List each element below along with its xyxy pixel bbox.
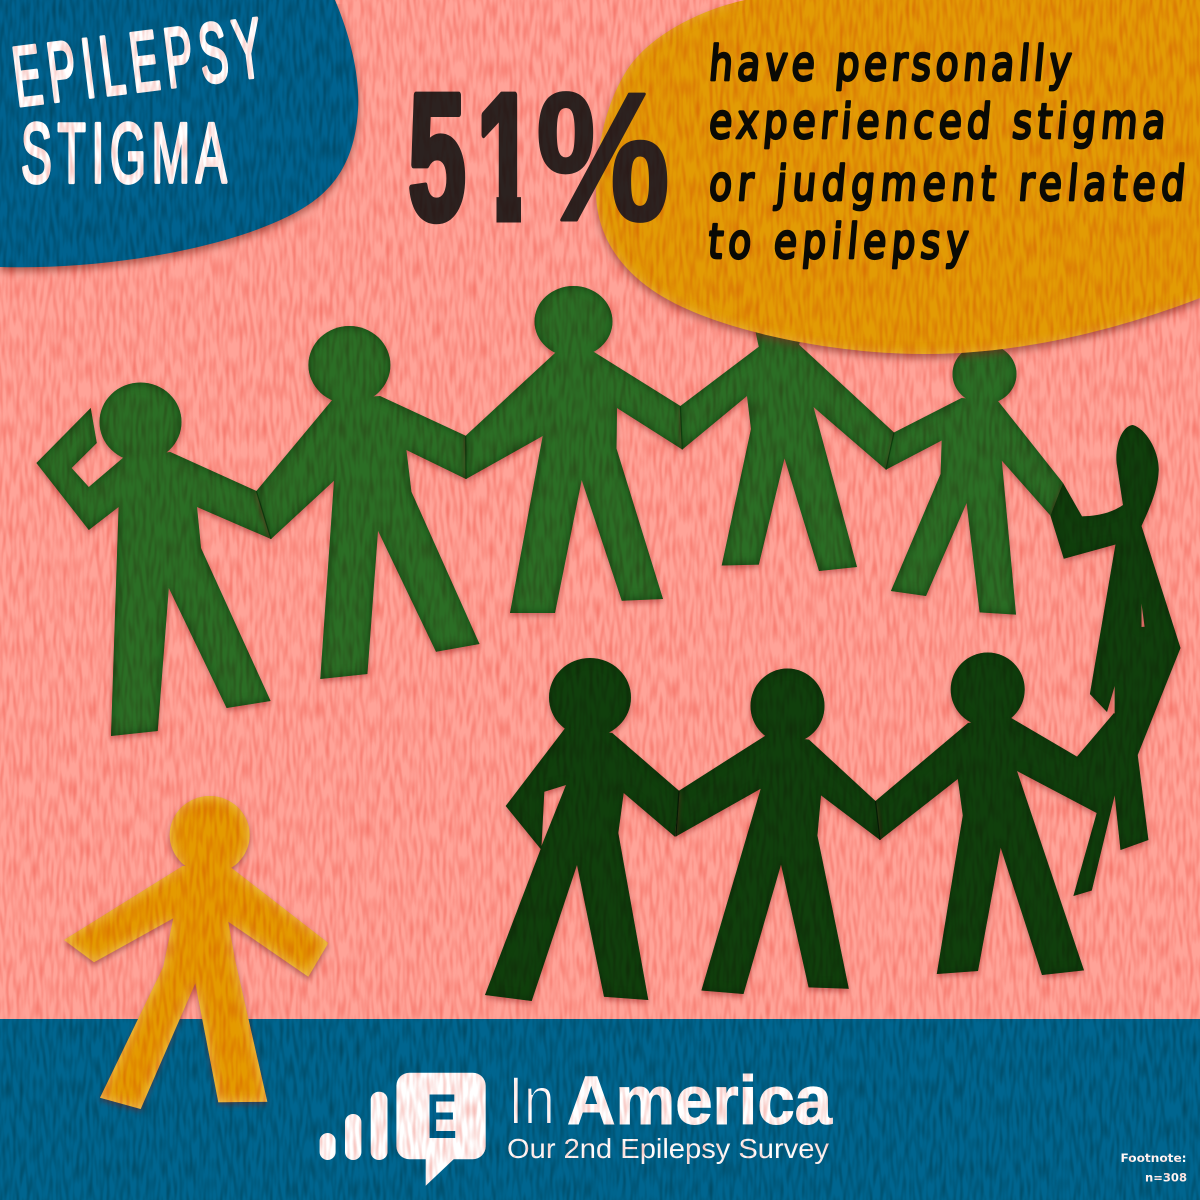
fold lines at the joined hands <box>256 406 894 840</box>
paper chain: figure 1, green person holding phone <box>36 382 271 736</box>
paper chain: figure 5, smaller green person <box>886 344 1063 615</box>
panel: statistic blob <box>596 0 1200 354</box>
paper chain: figure 9, dark green person hand on hip <box>485 658 679 1001</box>
logo subtitle: Our 2nd Epilepsy Survey <box>507 1133 829 1164</box>
title line: stigma: STIGMA <box>21 108 227 201</box>
logo: InAmerica, Our 2nd Epilepsy Survey <box>320 1062 833 1186</box>
figure: yellow outcast person <box>64 796 328 1109</box>
paper chain: figure 2, green person <box>256 326 480 679</box>
line 1: have personally <box>707 37 1074 92</box>
footer band <box>0 1019 1200 1200</box>
footnote <box>1120 1151 1187 1184</box>
icon: speech bubble <box>396 1073 486 1186</box>
title <box>8 1 267 201</box>
wordmark America: America <box>567 1062 833 1139</box>
line 4: to epilepsy <box>706 215 971 270</box>
footnote label: Footnote: <box>1120 1151 1186 1165</box>
line 3: or judgment related <box>707 157 1188 212</box>
title line: epilepsy: EPILEPSY <box>8 1 267 125</box>
number 51: 51 <box>408 58 535 258</box>
statistic: 51 percent <box>409 91 668 224</box>
statistic description text <box>706 37 1188 270</box>
footnote sample size: n=308 <box>1145 1170 1187 1184</box>
paper chain: figure 8, dark green person <box>676 668 880 994</box>
percent sign: % <box>536 54 670 259</box>
icon: signal bars <box>320 1092 388 1160</box>
panel: title blob <box>0 0 358 267</box>
paper chain: figure 3, green person <box>466 286 682 613</box>
paper chain: figure 4, green person, head behind callout <box>680 320 894 571</box>
bubble letter E: E <box>426 1082 457 1152</box>
line 2: experienced stigma <box>707 95 1168 150</box>
wordmark In: In <box>508 1062 555 1139</box>
paper chain: figures 6 and 7, dark side-on person joined to dark person <box>876 425 1180 975</box>
